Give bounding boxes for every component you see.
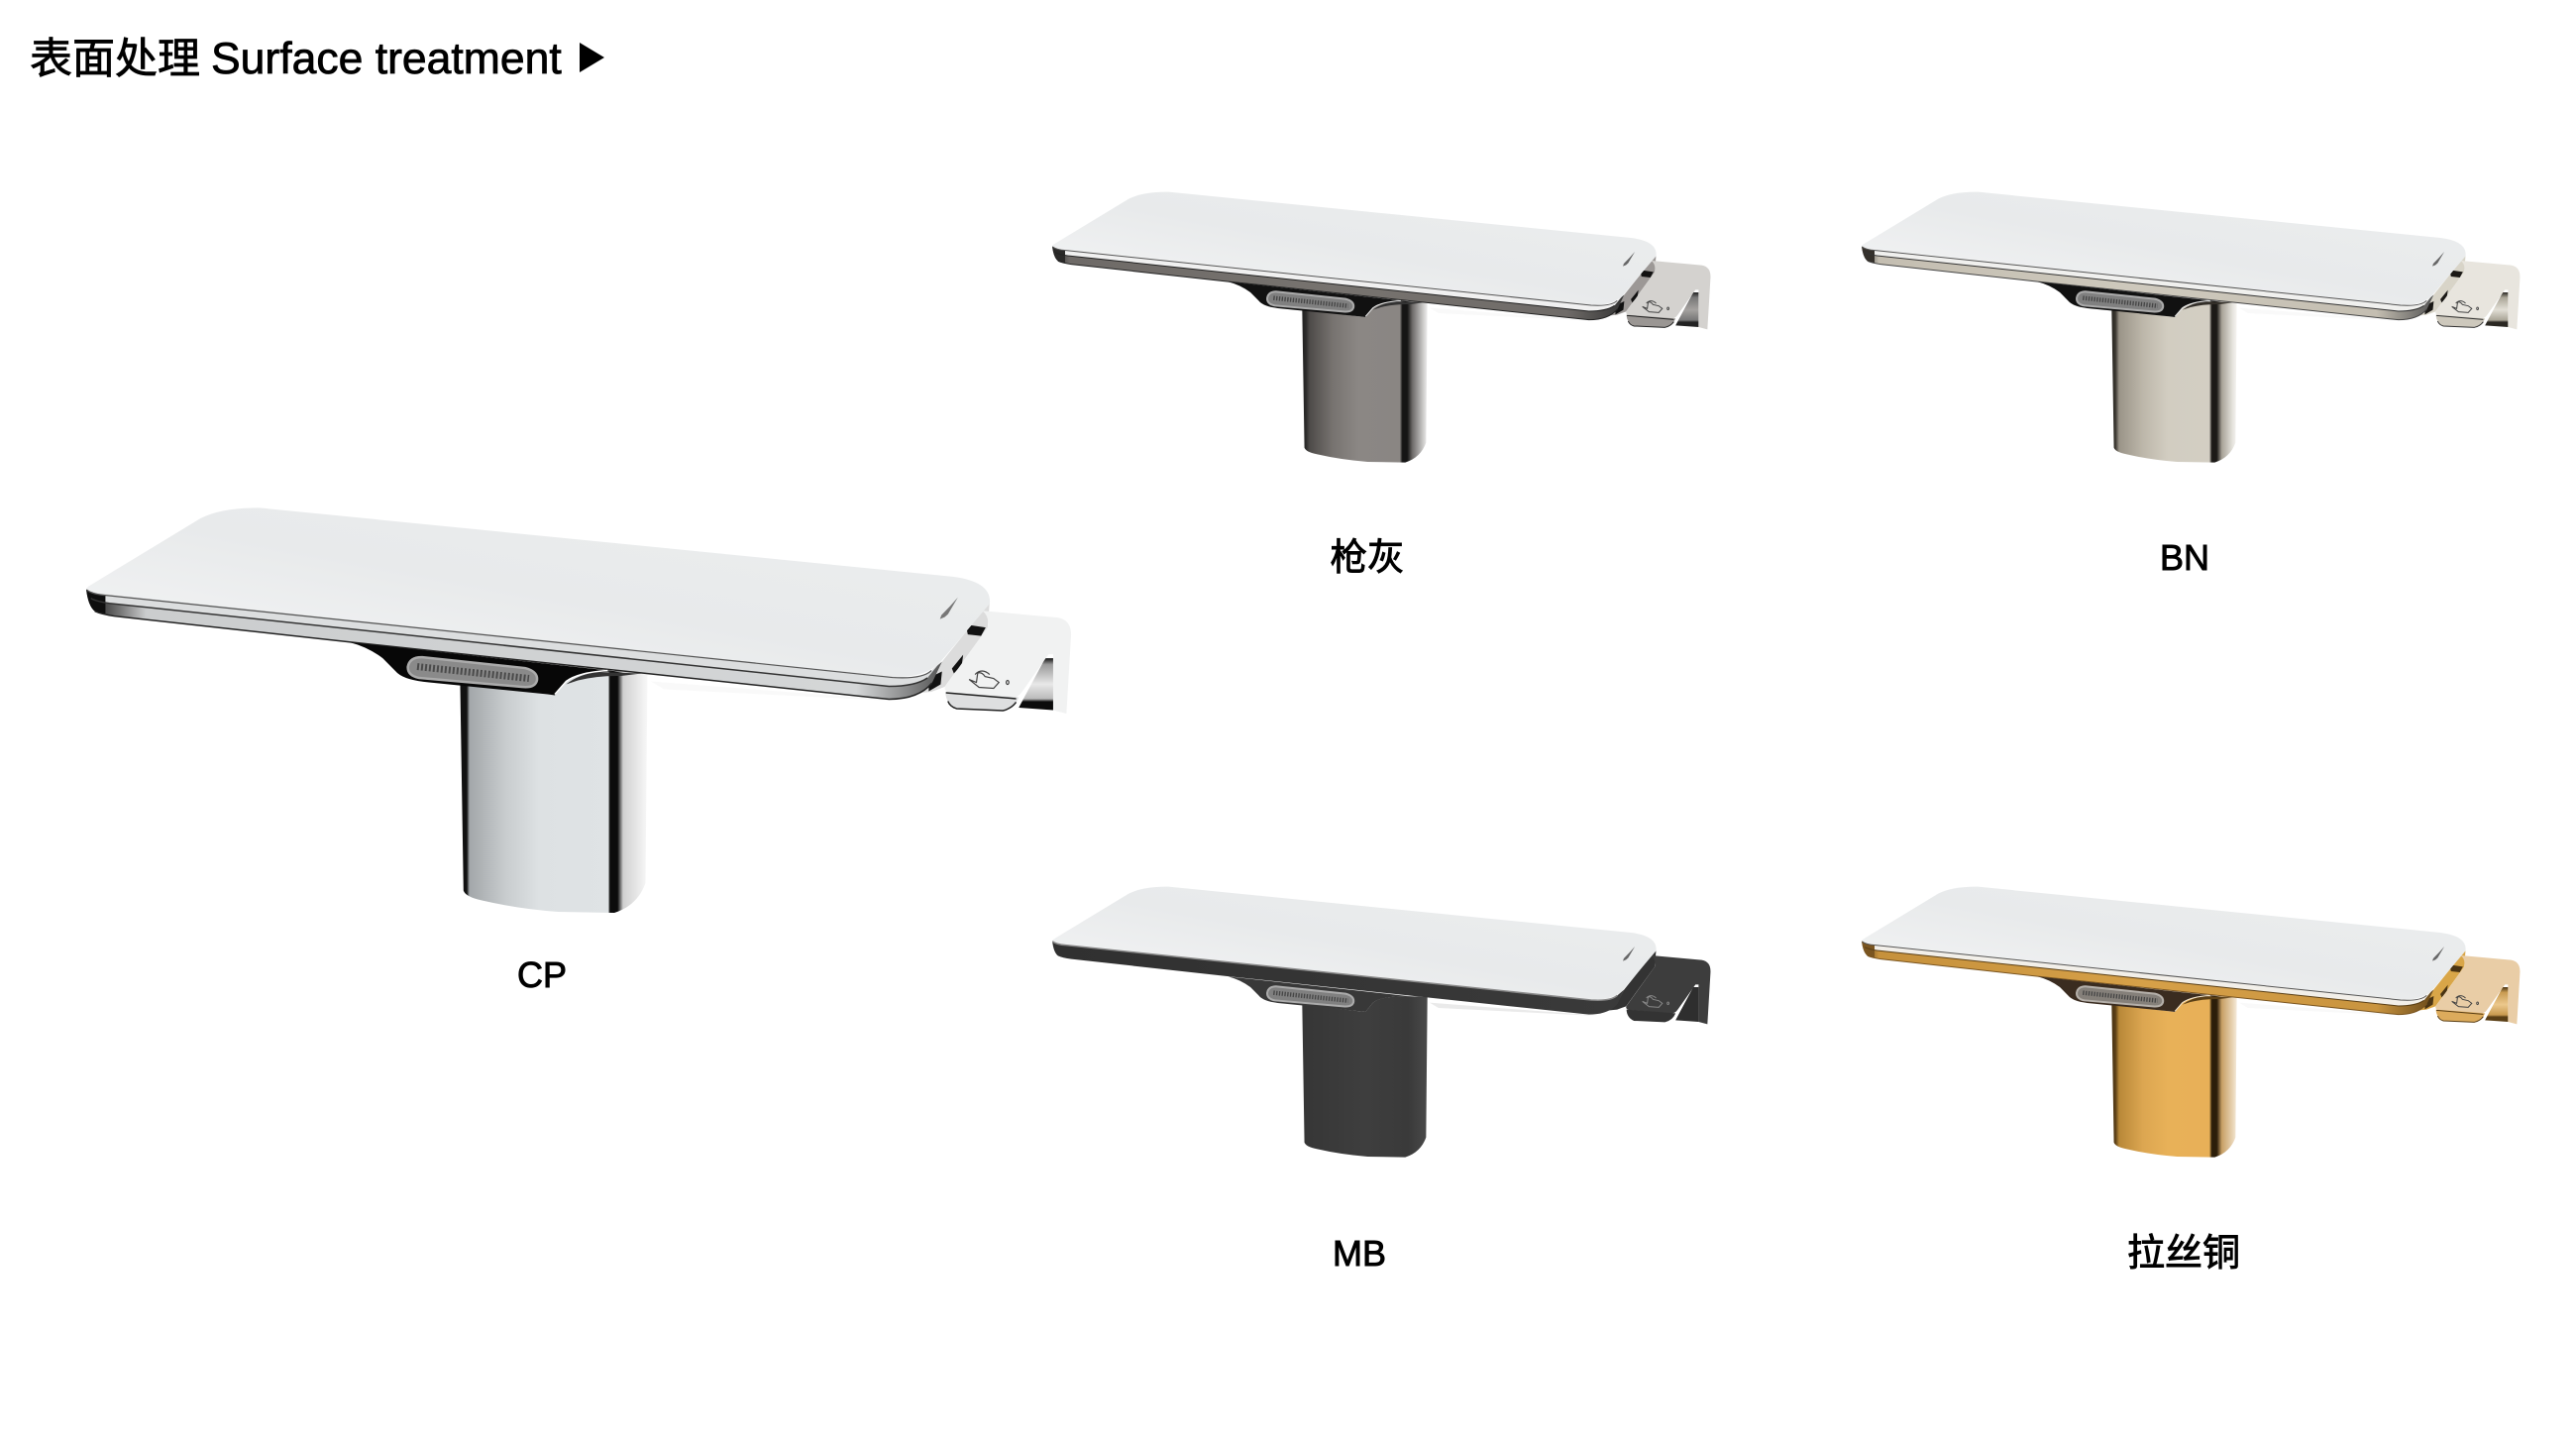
CP touch icon bbox=[969, 671, 1009, 689]
gunmetal notch bbox=[1623, 252, 1635, 267]
label: MB: MB bbox=[1333, 1233, 1386, 1274]
label: 拉丝铜: 拉丝铜 bbox=[2127, 1233, 2240, 1275]
BN rim bbox=[1862, 246, 2433, 320]
faucet: MB matte black bbox=[1052, 887, 1710, 1158]
icon: right-pointing arrow bbox=[580, 43, 604, 72]
copper handle bbox=[2239, 949, 2520, 1024]
MB touch icon bbox=[1643, 996, 1668, 1007]
CP rim bbox=[86, 589, 942, 699]
title: Surface treatment bbox=[211, 35, 562, 83]
gunmetal top surface bbox=[1052, 192, 1657, 305]
CP stem bbox=[460, 672, 648, 913]
copper collar highlight bbox=[2175, 995, 2233, 1011]
BN sensor bbox=[2038, 281, 2217, 317]
MB handle bbox=[1430, 949, 1710, 1024]
gunmetal sensor bbox=[1229, 281, 1408, 317]
BN touch icon bbox=[2452, 301, 2478, 312]
label: BN: BN bbox=[2160, 537, 2209, 578]
CP handle bbox=[651, 603, 1071, 714]
BN handle bbox=[2239, 255, 2520, 329]
BN stem bbox=[2111, 301, 2237, 463]
CP notch bbox=[940, 598, 958, 619]
MB rim bbox=[1052, 941, 1624, 1015]
CP collar highlight bbox=[555, 671, 641, 694]
faucet: gunmetal bbox=[1052, 192, 1710, 463]
label: CP: CP bbox=[517, 954, 567, 995]
BN notch bbox=[2432, 252, 2444, 267]
gunmetal stem bbox=[1302, 301, 1428, 463]
faucet: brushed copper bbox=[1862, 887, 2520, 1158]
faucet: CP chrome bbox=[86, 507, 1071, 913]
gunmetal touch icon bbox=[1643, 301, 1668, 312]
copper rim bbox=[1862, 941, 2433, 1015]
CP sensor bbox=[350, 642, 617, 695]
title bbox=[30, 35, 604, 83]
MB notch bbox=[1623, 947, 1635, 961]
copper touch icon bbox=[2452, 996, 2478, 1007]
copper notch bbox=[2432, 947, 2444, 961]
title: 表面处理 bbox=[30, 36, 200, 83]
gunmetal handle bbox=[1430, 255, 1710, 329]
gunmetal collar highlight bbox=[1365, 300, 1424, 316]
CP top surface bbox=[86, 507, 990, 678]
MB sensor bbox=[1229, 976, 1408, 1012]
copper top surface bbox=[1862, 887, 2466, 1000]
copper stem bbox=[2111, 996, 2237, 1158]
BN collar highlight bbox=[2175, 300, 2233, 316]
faucet: BN brushed nickel bbox=[1862, 192, 2520, 463]
copper sensor bbox=[2038, 976, 2217, 1012]
BN top surface bbox=[1862, 192, 2466, 305]
label: 枪灰: 枪灰 bbox=[1330, 536, 1405, 578]
MB stem bbox=[1302, 996, 1428, 1158]
gunmetal rim bbox=[1052, 246, 1624, 320]
MB top surface bbox=[1052, 887, 1657, 1000]
